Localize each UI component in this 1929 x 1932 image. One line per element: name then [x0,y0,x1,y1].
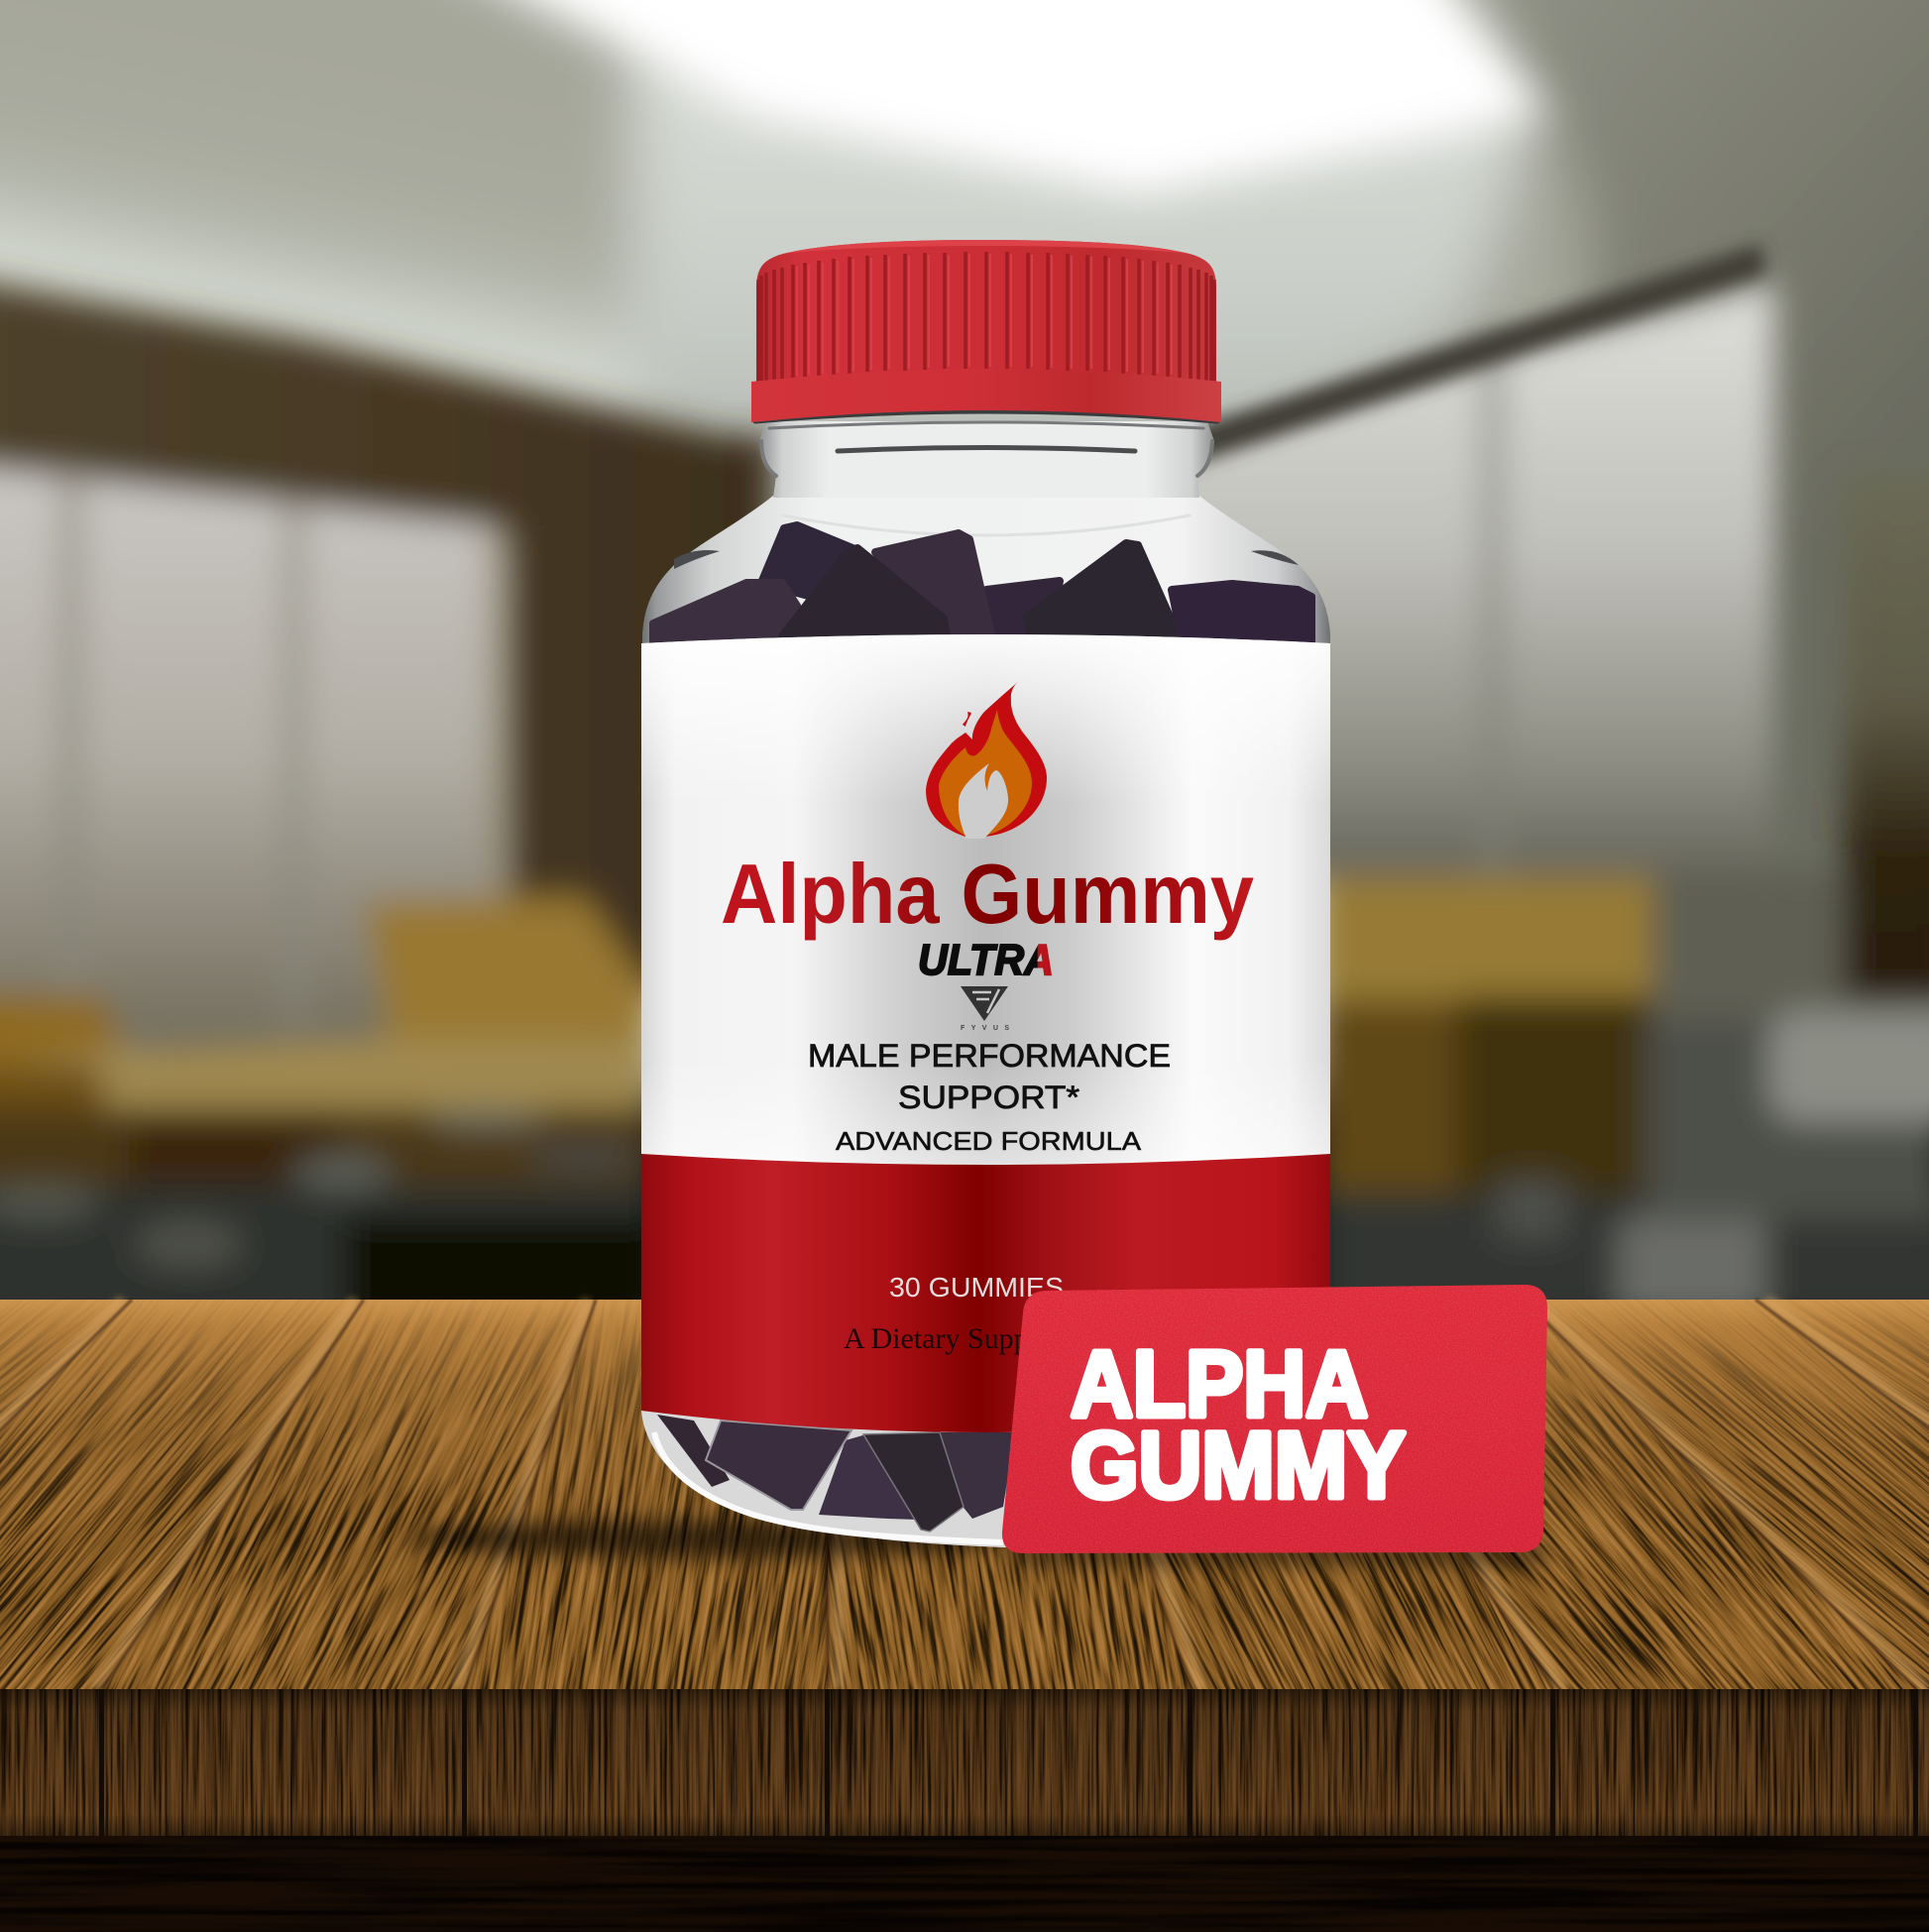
product bottle [641,240,1330,1547]
neck thread lines [755,411,1217,535]
cap ribs [758,252,1214,382]
icon: flame logo [926,680,1047,839]
gold low table [0,1039,649,1120]
ceiling and upper walls [0,0,1929,1090]
dark underside [0,1836,1929,1932]
bottle shadow on table [406,1519,1021,1558]
glass jar [641,411,1330,1289]
red label band [641,1154,1330,1432]
cap band [751,369,1221,422]
shoulder glints [674,550,1299,569]
warm out of focus back of table [0,1300,1929,1528]
card wordmark: GUMMY [1071,1414,1406,1519]
gummies above label [653,525,1311,644]
icon: FV brand mark: FYVUS [961,1025,1009,1032]
servings text: 30 GUMMIES [889,1272,1064,1303]
left sofa [365,897,649,1090]
tagline [808,1038,1171,1156]
card paper texture [996,1279,1551,1558]
bright ceiling light [377,0,1546,194]
glass bottom with gummies [641,1388,1090,1547]
icon: FV brand mark [961,986,1009,1032]
cap top rim [783,240,1190,254]
card wordmark [1071,1332,1406,1519]
right window divider [1481,327,1505,882]
card shadow on table [1011,1546,1546,1564]
right light cushion [1769,1011,1929,1122]
dark furniture at right [1844,476,1929,1001]
table front edge [0,1689,1929,1836]
lower right wall [1645,872,1929,1021]
room furniture and windows [0,274,1929,1328]
brown under table [0,1108,654,1193]
product name: Alpha Gummy [721,848,1254,942]
floor left [0,1185,654,1323]
plank tops with grain [0,1289,1929,1695]
floor right [1318,1194,1929,1323]
front plank gaps [99,1689,1918,1836]
tagline: MALE PERFORMANCE [808,1038,1171,1074]
supplement text: A Dietary Supplement [844,1322,1110,1355]
tagline: SUPPORT* [898,1080,1079,1115]
floor highlight right [1618,1219,1766,1318]
left window dividers [57,466,307,1031]
ULTRA wordmark: ULTRA [918,936,1054,984]
glass neck [759,421,1214,498]
brown beam and column [0,274,773,991]
floor highlights left [0,1106,644,1268]
card wordmark: ALPHA [1071,1332,1368,1437]
plank joints [0,1300,1929,1689]
right sofa [1318,876,1653,1010]
wooden table [0,1289,1929,1932]
plank bevel highlights [0,1300,1929,1689]
right windows [1140,283,1774,877]
white label [641,634,1330,1165]
formula line: ADVANCED FORMULA [836,1126,1142,1156]
far left cushion [0,991,124,1076]
red Alpha Gummy card [996,1279,1551,1558]
column light strip [488,525,510,1031]
blurred room background [0,0,1929,1328]
red cap [751,240,1221,422]
slim ceiling beam [1140,244,1766,482]
left windows [0,462,501,1051]
darker lower wood tone [0,1300,1929,1689]
